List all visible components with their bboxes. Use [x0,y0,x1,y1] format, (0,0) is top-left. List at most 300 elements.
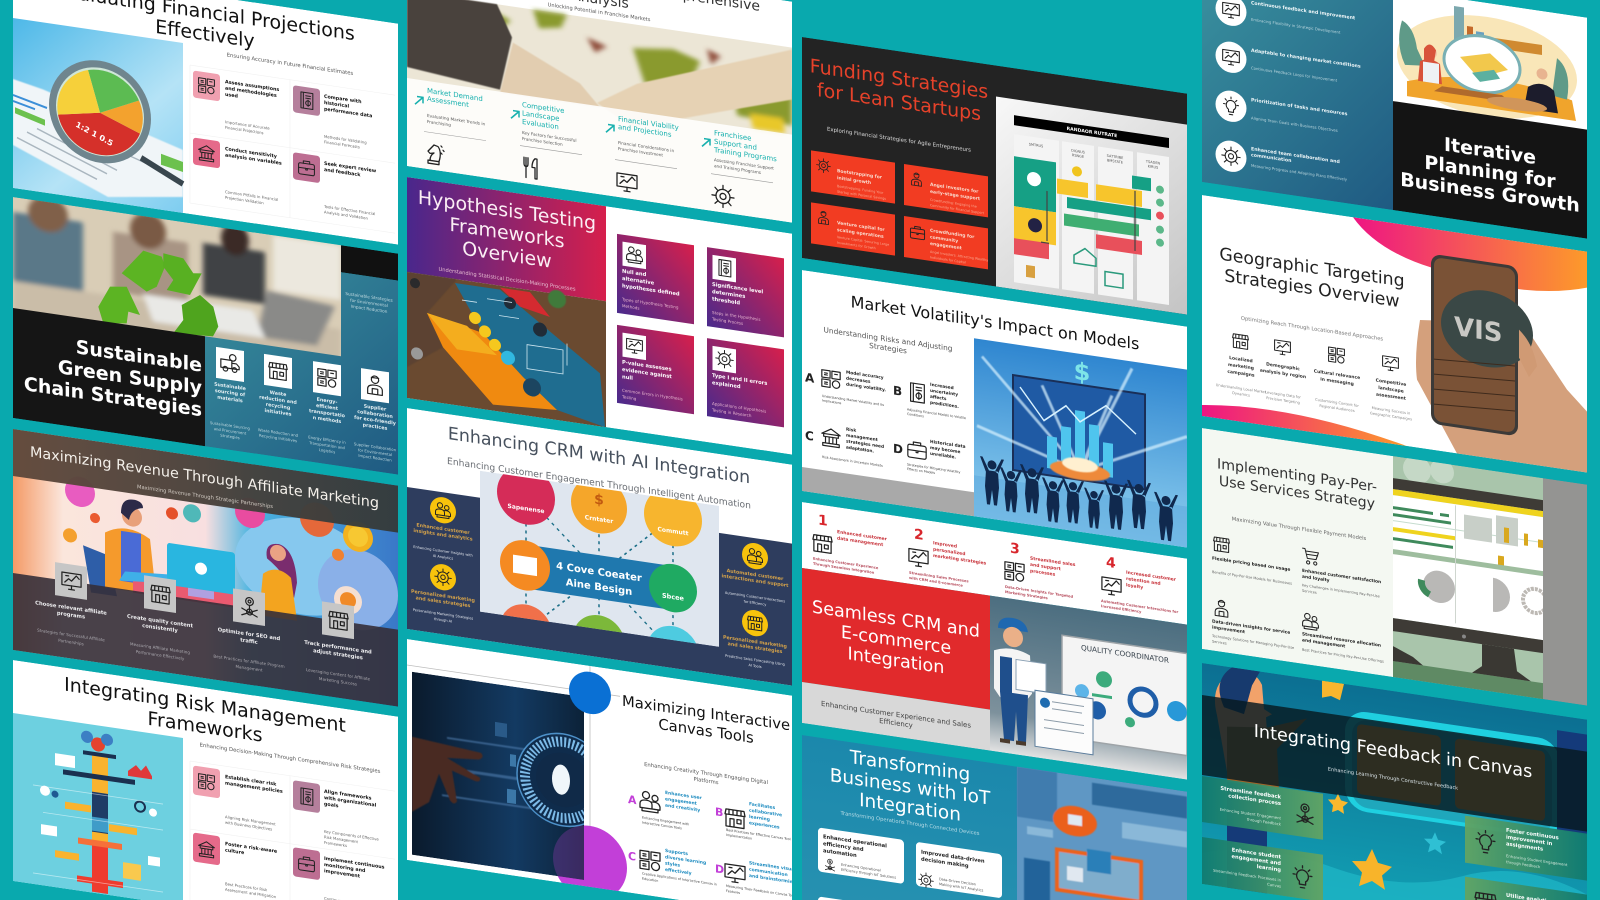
card: crowdfunding: community [930,234,958,244]
title: Funding Strategies [810,54,988,103]
title: Integration [859,790,961,826]
tactic 4: Leveraging Content for Affiliate [306,667,370,681]
image: student and feedback illustration [1202,663,1587,900]
item 1: and Procurement [214,426,247,436]
point 4: Streamlined resource allocation [1302,632,1381,649]
point 2: Align frameworks [324,790,372,802]
card: bootstrapping [811,150,895,204]
item A: A [628,793,637,807]
card: third row [818,896,1002,900]
strategy 1: Localized [1229,356,1253,364]
item C [628,843,717,892]
left column [411,493,476,627]
panel: title in red [802,568,990,710]
step 1: Embracing Flexibility in Strategic Development [1251,17,1341,35]
panel: title gradient: Understanding Statistical Decision-Making Processes [438,267,576,293]
card: crowdfunding [904,216,988,269]
item 4: practices [363,422,387,432]
card: angel investors: Community for Financial Support [930,203,985,215]
left column: Personalizing Marketing Strategies [413,608,473,621]
item A: Implications [822,398,842,405]
subtitle: Unlocking Potential in Franchise Markets [548,2,651,23]
title: Maximizing Interactive [622,692,790,734]
point 4: Tools for Effective Financial [324,204,375,216]
item 1: Strategies [220,432,240,440]
card: p-value: Common Errors in Hypothesis [622,388,683,402]
diagram: connected circles: Aine Besign [566,577,632,598]
item 1: sourcing of [215,388,246,399]
point 4: improvement [324,868,361,880]
point 3: improvement [1212,624,1245,635]
strategy 4: landscape [1378,385,1404,395]
point 2: Financial Forecasts [324,139,360,149]
title: Geographic Targeting [1219,245,1405,292]
item A: A [805,370,815,386]
diagram: connected circles: Commutt [658,526,689,537]
card: bootstrapping: Bootstrapping: Funding Your [837,184,883,195]
card: venture capital [811,202,895,256]
item B: collaborative [749,808,782,818]
step 1 [1216,0,1356,44]
tactic 1: Partnerships [58,638,84,646]
panel: subtitle in grey [802,682,990,751]
item 3 [308,360,346,456]
point 3 [193,832,278,899]
band: title [13,429,398,533]
item C: Supports [665,849,688,857]
item 1: data management [837,535,884,548]
slide: Sustainable Green Supply Chain [13,191,398,475]
panel: teal strategies: for Environmental [350,298,388,308]
item 3: Marketing Strategies [1005,590,1048,600]
title: Market Volatility's Impact on Models [851,292,1139,354]
point 4: monitoring and [324,862,366,874]
item C: effectively [665,867,692,877]
point 3: Services [1212,639,1227,646]
slide: Funding Strategies for Lean Startups [802,37,1187,315]
column: Financial Viability and Projections: Franchise Investment [618,146,663,158]
card: enhance student engagement: engagement and [1232,854,1281,867]
strategy 2: Demographic [1266,362,1300,372]
column: Competitive Landscape Evaluation: Competitive [522,100,564,115]
image: quality coordinator with certificate [990,596,1187,780]
title: Strategies Overview [1224,266,1400,312]
left column: insights and analytics [413,528,473,543]
item 4 [1101,554,1178,620]
point 4: Best Practices for Pricing Pay-Per-Use Offerings [1302,648,1384,664]
point 1: Benefits of Pay-Per-Use Models for Businesses [1212,570,1292,586]
column: Financial Viability and Projections: Financial Considerations in [618,140,674,153]
tactic 3: Management [236,664,263,673]
point 1 [193,765,283,833]
item D: Features [726,889,740,895]
column: Financial Viability and Projections [606,112,679,199]
strategy 1 [1216,331,1267,400]
slide: Franchise Opportunities Analysis [407,0,792,223]
panel: title on black: Business Growth [1400,168,1580,217]
card: enhance student engagement: Streamlining Feedback Processes in [1213,868,1281,883]
panel: title gradient: Overview [462,237,552,273]
right column: Automated customer [727,569,783,582]
step 4 [1216,138,1348,189]
band: title: Enhancing Learning Through Constructive Feedback [1328,767,1458,792]
card: type I and II errors [707,338,784,427]
point 2: Key Challenges in Implementing Pay-Per-Use [1302,583,1380,599]
title: Canvas Tools [658,715,754,747]
panel: kanban board illustration [996,97,1187,315]
card: angel investors: Crowdfunding: Engaging the [930,198,977,209]
card: crowdfunding: engagement [930,241,963,252]
item 2 [909,526,987,591]
item 3: Logistics [319,447,335,454]
slide: Market Volatility's Impact on Models [802,270,1187,548]
item D: and brainstorming [749,873,796,886]
item 3: Energy- [317,398,337,406]
item A: Model accuracy [846,370,884,381]
item C: diverse learning [665,854,706,866]
panel: subtitle in grey: Enhancing Customer Experience and Sales [821,699,971,730]
card: type I and II errors: explained [712,380,741,390]
panel: title on black: Chain Strategies [24,372,202,421]
point 3: Assessment and Mitigation [225,887,277,899]
left column: and sales strategies [416,595,470,609]
point 1: Importance of Accurate [225,119,270,131]
column: Competitive Landscape Evaluation: Franchise Selection [522,136,563,147]
step 4: Enhanced team collaboration and [1251,147,1340,165]
item 4: Supplier Collaboration [354,441,396,452]
card: null and alternative hypotheses: alternative [622,276,655,287]
band: title: Maximizing Revenue Through Strategic Partnerships [137,484,273,510]
item B: learning [749,814,770,823]
point 1: Flexible pricing based on usage [1212,555,1290,573]
tactic 4: adjust strategies [313,648,363,661]
card: operational efficiency: efficiency and [823,841,864,853]
item 2: Streamlining Sales Processes [909,571,969,583]
step 2: Continuous Feedback Loops for Improvement [1251,65,1338,83]
item 3: Transportation and [308,440,345,450]
item A: Enhances user [665,791,702,801]
item 4: Impact Reduction [358,453,392,463]
card: type I and II errors: Applications of Hypothesis [712,401,766,414]
card: significance level [707,247,784,337]
item 4: retention and [1126,576,1161,587]
right column: Personalized marketing [723,635,787,650]
slide: Implementing Pay-Per-Use Services Strategy [1202,424,1587,706]
panel: teal strategies: Impact Reduction [351,304,388,314]
item C: C [628,850,636,864]
item 4: for eco-friendly [354,415,397,427]
image: handshake over world map [407,0,792,223]
point 2: and loyalty [1302,574,1330,584]
panel: title in red: E-commerce [841,623,951,659]
title: Transforming [850,747,970,786]
item B [893,376,966,425]
tactic 3: Optimize for SEO and [218,627,280,642]
image: isometric smart factory [1017,767,1187,900]
tactic 3: traffic [240,637,258,646]
item B: Increased [930,383,954,391]
diagram: connected circles: Crntater [585,514,613,525]
card: angel investors [904,164,988,217]
strategy 4 [1370,354,1412,421]
point 3 [1211,599,1294,656]
strategy 2 [1260,338,1306,406]
card: operational efficiency: Enhanced operational [823,834,887,849]
tactic 2: Measuring Affiliate Marketing [130,641,190,655]
card: p-value: Testing [621,394,637,401]
card: foster continuous improvement: through Feedback [1506,859,1541,869]
item B: Facilitates [749,802,775,811]
item D [715,855,796,900]
image: dashboard on a monitor [1393,452,1547,700]
image: crowd cheering at a market chart: $ [1074,357,1090,387]
card: bootstrapping: Bootstrapping for [837,169,882,181]
card: p-value: null [622,374,633,382]
card: venture capital: Investments for Growth [837,241,876,250]
slide: Maximizing Revenue Through Affiliate Marketing [13,429,398,707]
band: title: Integrating Feedback in Canvas [1254,722,1532,783]
subtitle: Understanding Risks and Adjusting [824,325,952,353]
point 2: Enhanced customer satisfaction [1302,569,1381,585]
point 2: Key Components of Effective [324,829,379,842]
item A: Enhancing Engagement with [642,816,689,826]
right column: and sales strategies [728,641,782,655]
card: enhance student engagement: Enhance student [1232,847,1281,861]
item C: Education [642,877,658,883]
title: for Lean Startups [817,78,981,125]
tactic 1: programs [57,610,85,621]
panel: title on black [1393,101,1587,239]
item D: unreliable. [930,451,956,461]
image: business planning illustration [1393,0,1587,132]
tactic 1 [35,559,107,650]
left column: Enhanced customer [416,523,470,536]
slide: Integrating Feedback in Canvas [1202,663,1587,900]
tactic 2: Performance Effectively [136,649,185,661]
card: crowdfunding: Angel Investors: Attracting Wealthy [930,250,988,262]
subtitle: Enhancing Customer Engagement Through Intelligent Automation [447,456,751,512]
slide: Hypothesis Testing Frameworks [407,177,792,455]
strategy 3: Customizing Content for [1315,398,1359,408]
panel: kanban board illustration: SATTRIBE [1107,154,1123,160]
image: risk tower illustration [13,713,183,900]
strategy 4: Measuring Success in [1372,406,1410,416]
tactic 2 [127,573,193,663]
slide: Integrating Risk Management Frameworks [13,660,398,900]
point 3: culture [225,847,245,856]
strategy 1: campaigns [1227,369,1255,379]
card: data-driven decisions: Data-Driven Decision [939,877,976,887]
item A: engagement [665,796,698,807]
left column: Enhancing Customer Insights with [413,545,473,558]
item 2: Waste Reduction and [258,427,298,438]
item D: Historical data [930,440,966,450]
point 3: Foster a risk-aware [225,842,277,855]
item 1: 1 [818,512,828,530]
point 3: Best Practices for Risk [225,881,267,892]
band: title [1202,695,1587,832]
diagram: connected circles: $ [594,492,604,509]
card: enhance student engagement: learning [1257,864,1281,874]
card: streamline feedback collection: Streamline feedback [1220,786,1281,801]
item B: predictions. [930,400,959,410]
image: hand holding a smartphone [1416,251,1587,473]
right column [722,538,789,673]
right column: AI Tools [748,663,762,669]
card: operational efficiency [818,827,904,884]
tactic 4: Marketing Success [319,676,357,687]
card: bootstrapping: Startup with Personal Savings [837,190,886,201]
card: significance level: Testing Process [711,316,743,326]
card: significance level: Steps in the Hypothesis [712,310,760,322]
card: angel investors: early-stage support [930,189,981,202]
title: Enhancing CRM with AI Integration [448,424,750,488]
title: Frameworks [147,707,263,747]
column: Franchisee Support and Training Programs: Support and [714,137,757,152]
right column: for Efficiency [744,600,766,607]
grey side strip [1543,478,1587,706]
subtitle: Platforms [693,777,719,786]
item D: Streamlines visual [749,861,796,873]
panel: title in red: Integration [848,644,944,678]
item A: decreases [846,375,871,385]
item C: management [846,432,878,443]
card: crowdfunding: Crowdfunding for [930,229,974,240]
band: title: Maximizing Revenue Through Affiliate Marketing [30,445,379,512]
point 2: Frameworks [324,840,347,848]
item 4: 4 [1106,555,1116,572]
strategy 3: Cultural relevance [1314,369,1360,381]
column: Franchisee Support and Training Programs [702,126,777,215]
point 2: goals [324,801,339,809]
item B: B [715,805,723,819]
point 2 [293,780,379,853]
slide: Seamless CRM and E-commerce Integration [802,502,1187,780]
item A: during volatility. [846,381,886,393]
item C: adaptation. [846,444,874,455]
item B: Best Practices for Effective Canvas Tool [726,828,791,841]
item B: Adjusting Financial Models to Volatile [907,407,966,420]
point 2: Methods for Validating [324,134,367,145]
point 1: Financial Projections [225,125,264,135]
left column: through AI [434,617,452,624]
strategy 2: Leveraging Data for [1265,390,1301,400]
item A: and creativity [665,803,700,814]
point 1: with Business Objectives [225,820,272,832]
card: venture capital: Venture Capital: Securing Large [837,235,889,247]
item 3 [1005,540,1076,604]
item 1: materials [217,395,243,404]
tactic 3 [213,585,285,676]
grid of four points [190,761,395,900]
card: p-value: P-value assesses [622,360,672,373]
panel: title on black: Sustainable [76,335,202,377]
step 3 [1216,88,1348,139]
item A [805,363,886,412]
tactic 2: consistently [142,623,178,634]
item 3: 3 [1010,541,1020,558]
item 4: collaboration [357,409,393,420]
column: Financial Viability and Projections: and Projections [618,122,672,139]
band: four tactics [13,556,398,707]
column: Franchisee Support and Training Programs: Franchisee [714,128,752,143]
item D [893,433,966,480]
item 2: Improved [933,541,957,550]
column: Competitive Landscape Evaluation: Landscape [522,108,560,123]
card: operational efficiency: automation [823,848,857,859]
diagram: connected circles [480,460,719,685]
item 4: for Environmental [358,447,392,457]
title: Effectively [155,15,255,53]
point 4 [293,847,385,900]
item 2: Waste [270,391,286,398]
item D: D [715,862,724,877]
strategy 4: Competitive [1376,379,1406,388]
column: Market Demand Assessment: Market Demand [427,86,483,103]
item B: uncertainty [930,388,958,398]
point 4: and management [1302,637,1345,650]
image: magnifier over financial charts: 1:2 1 0.5 [74,120,115,148]
card: foster continuous improvement: assignments [1506,841,1543,853]
right column: interactions and support [722,573,789,589]
item 3: efficient [316,403,339,412]
panel: kanban board illustration: SMTRUS [1029,142,1044,149]
right column: Predictive Sales Forecasting Using [725,654,785,667]
title: Business with IoT [830,765,991,810]
card: p-value: evidence against [622,367,672,380]
strategy 2: Precision Targeting [1266,396,1300,405]
item 3: Data-Driven Insights for Targeted [1005,585,1073,599]
point 4 [1302,613,1384,664]
point 4 [293,152,377,222]
column: Competitive Landscape Evaluation [511,98,582,186]
panel: teal strategies: Sustainable Strategies [345,291,393,303]
point 3: Projection Validation [225,195,264,205]
card: bootstrapping: initial growth [837,175,871,186]
card: significance level: threshold [712,296,740,307]
card: enhance student engagement [1202,837,1323,900]
card: streamline feedback collection: through Feedback [1247,817,1282,827]
item B: affects [930,394,947,402]
image: magnifier over financial charts [13,18,183,213]
card: type I and II errors: Testing in Research [711,407,752,418]
card: venture capital: Venture capital for [837,221,885,233]
point 2: historical [324,100,350,110]
panel: teal strategies [205,252,398,475]
item C: strategies need [846,438,884,450]
point 1 [193,70,279,138]
panel: kanban board illustration: KIRUS [1148,164,1159,170]
point 1: and methodologies [225,85,277,99]
item C: Creative Applications of Interactive Canvas in [642,872,717,887]
point 2: performance data [324,106,372,119]
strategy 4: Geographic Campaigns [1370,411,1412,421]
point 4: and feedback [324,167,361,178]
column: Market Demand Assessment: Evaluating Market Trends in [427,113,485,126]
panel: title gradient: Hypothesis Testing [418,186,596,235]
point 3: Common Pitfalls in Financial [225,189,278,202]
item 4: loyalty [1126,582,1143,591]
decorative purple circle [553,820,627,900]
item D: Measuring Their Feedback on Canvas Tool [726,884,795,898]
right column: Automating Customer Interactions [725,591,785,604]
item D: communication [749,867,788,878]
item C: Risk [846,427,856,434]
image: quality coordinator with certificate: QUALITY COORDINATOR [1081,643,1169,665]
point 2: with organizational [324,795,377,809]
point 1: Aligning Risk Management [225,814,276,827]
card: significance level: Significance level [712,282,763,295]
